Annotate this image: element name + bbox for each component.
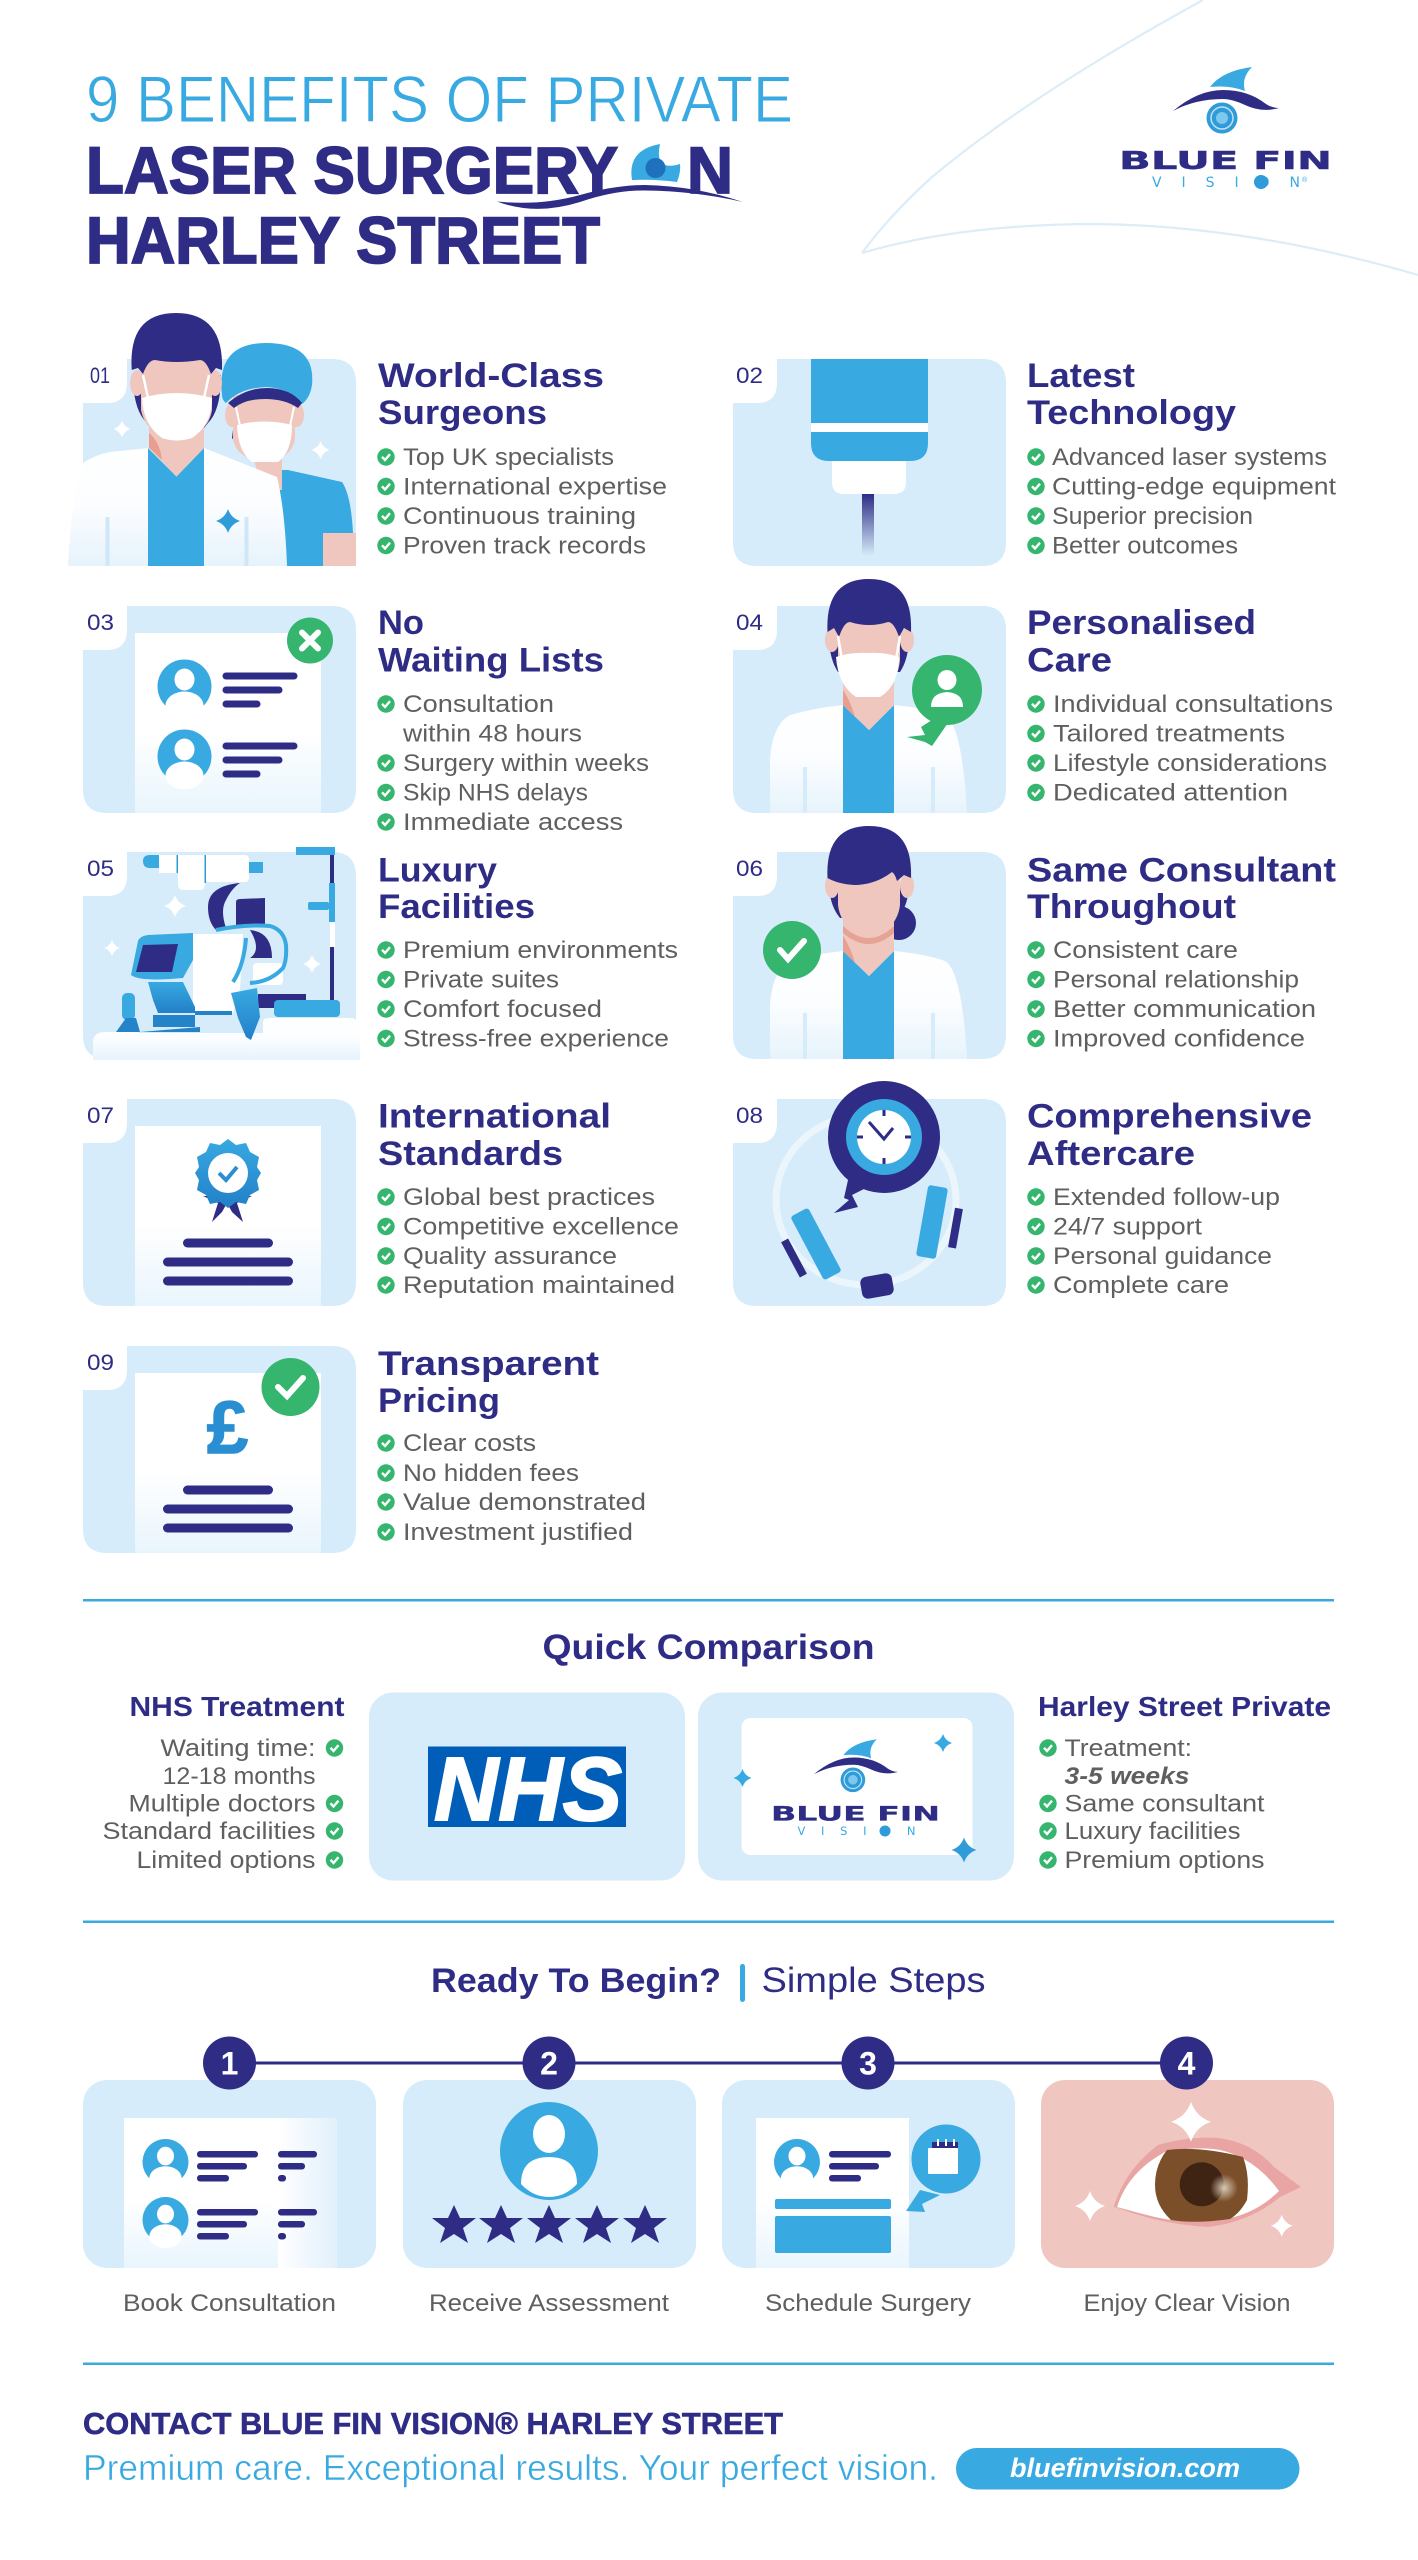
panel: 06 Same Consultant Throughout (733, 826, 1336, 1059)
panel: 09 Transparent Pricing (83, 1345, 646, 1553)
number: 03 (87, 610, 114, 635)
heading (378, 1345, 599, 1420)
heading: Technology (1027, 394, 1236, 432)
number: 06 (736, 856, 763, 881)
illustration: two surgeons (68, 313, 356, 566)
checklist: Premium environments (403, 937, 678, 964)
title: LASER SURGERY (86, 133, 618, 207)
number: 09 (87, 1350, 114, 1375)
heading (378, 1098, 611, 1173)
heading: Care (1027, 642, 1112, 680)
checklist: Personal guidance (1053, 1243, 1272, 1270)
checklist: Personal relationship (1053, 966, 1299, 994)
column: Harley Street Private: Same consultant (1064, 1790, 1265, 1818)
panel: Blue Fin Vision logo card: VISION (798, 1824, 916, 1838)
checklist (377, 937, 678, 1052)
title: N (687, 133, 733, 207)
heading: Facilities (378, 888, 535, 926)
title (86, 62, 793, 277)
section: Ready To Begin steps (83, 1961, 1334, 2317)
column: Harley Street Private: Harley Street Private (1038, 1691, 1331, 1722)
checklist: Reputation maintained (403, 1272, 675, 1299)
checklist: Proven track records (403, 532, 646, 560)
section: Quick Comparison (102, 1628, 1331, 1880)
checklist: Surgery within weeks (403, 750, 649, 777)
heading: Personalised (1027, 604, 1256, 642)
icon: eye letter O and swoosh (497, 144, 743, 209)
checklist: Advanced laser systems (1052, 444, 1327, 471)
illustration: price document (83, 1346, 356, 1553)
illustration: price document: £ (207, 1386, 248, 1469)
column: Harley Street Private (1038, 1691, 1331, 1874)
panel: 07 International Standards (83, 1098, 679, 1306)
step 2: Receive Assessment: Receive Assessment (429, 2290, 669, 2317)
title: 9 BENEFITS OF PRIVATE (86, 62, 793, 136)
heading (378, 604, 604, 680)
checklist: International expertise (403, 474, 667, 500)
checklist (1027, 691, 1333, 806)
panel: 04 Personalised Care (733, 579, 1333, 813)
tagline: Premium care. Exceptional results. Your perfect vision. (83, 2447, 938, 2488)
checklist: Clear costs (403, 1430, 536, 1457)
website pill: bluefinvision.com (1010, 2453, 1240, 2483)
checklist: Consistent care (1053, 937, 1238, 964)
step 1: Book Consultation: 1 (221, 2046, 238, 2082)
heading: Pricing (378, 1382, 500, 1420)
heading (378, 357, 604, 432)
illustration: certificate with rosette (83, 1099, 356, 1306)
checklist: Competitive excellence (403, 1214, 679, 1240)
column: NHS Treatment (102, 1691, 344, 1874)
checklist (377, 1430, 646, 1546)
column: NHS Treatment: Multiple doctors (128, 1790, 316, 1818)
checklist (1027, 444, 1336, 560)
heading: Throughout (1027, 888, 1236, 926)
number: 08 (736, 1103, 763, 1128)
panel: Blue Fin Vision logo card: BLUE FIN (771, 1802, 940, 1826)
checklist: Cutting-edge equipment (1052, 474, 1336, 500)
column: Harley Street Private: 3-5 weeks (1064, 1763, 1190, 1790)
heading: International (378, 1098, 611, 1136)
step 4: Enjoy Clear Vision: 4 (1178, 2046, 1196, 2082)
number: 07 (87, 1103, 114, 1128)
checklist: Quality assurance (403, 1243, 617, 1270)
checklist: within 48 hours (402, 720, 582, 748)
panel: NHS logo: NHS (434, 1740, 622, 1840)
illustration: eye examination machine (83, 847, 360, 1060)
title: HARLEY STREET (86, 203, 600, 277)
panel: 03 No Waiting Lists (83, 604, 649, 836)
checklist: Value demonstrated (403, 1489, 646, 1516)
column: NHS Treatment: Limited options (136, 1847, 316, 1874)
checklist: Superior precision (1052, 503, 1253, 530)
step 2: Receive Assessment: 2 (540, 2046, 558, 2082)
heading: Ready To Begin | Simple Steps (431, 1961, 986, 2002)
step 4: Enjoy Clear Vision (1041, 2036, 1334, 2317)
heading (1027, 357, 1236, 432)
step 3: Schedule Surgery: Schedule Surgery (765, 2290, 971, 2317)
checklist: Continuous training (403, 503, 636, 530)
illustration: laser device (733, 359, 1006, 566)
heading: Quick Comparison: Quick Comparison (542, 1628, 874, 1667)
column: Harley Street Private: Treatment: (1064, 1735, 1192, 1762)
illustration: patient documents (83, 606, 356, 813)
heading: Standards (378, 1135, 563, 1173)
column: Harley Street Private: Luxury facilities (1064, 1818, 1240, 1845)
footer: contact (83, 2406, 1300, 2490)
step 3: Schedule Surgery: 3 (859, 2046, 877, 2082)
panel: NHS logo (369, 1692, 685, 1880)
checklist: Extended follow-up (1053, 1184, 1280, 1211)
heading: Aftercare (1027, 1135, 1195, 1173)
logo: Blue Fin Vision (1119, 67, 1332, 191)
column: Harley Street Private: Premium options (1064, 1847, 1264, 1874)
checklist: Comfort focused (403, 996, 602, 1023)
checklist (1027, 1184, 1280, 1299)
number: 01 (90, 363, 110, 388)
number: 05 (87, 856, 114, 881)
panel: 02 Latest Technology (733, 357, 1336, 566)
heading (378, 852, 535, 926)
heading (1027, 604, 1256, 680)
step 1: Book Consultation: Book Consultation (123, 2290, 336, 2317)
column: NHS Treatment: 12-18 months (162, 1763, 316, 1790)
checklist: Lifestyle considerations (1053, 750, 1327, 777)
heading: Same Consultant (1027, 852, 1336, 890)
heading: Luxury (378, 852, 497, 890)
background fin outline (862, 0, 1418, 275)
heading: Ready To Begin | Simple Steps: Simple Steps (762, 1961, 986, 2000)
checklist: Better outcomes (1052, 532, 1238, 560)
column: NHS Treatment: Waiting time: (160, 1735, 316, 1762)
number: 04 (736, 610, 763, 635)
heading (1027, 852, 1336, 926)
contact heading: CONTACT BLUE FIN VISION® HARLEY STREET (83, 2406, 783, 2441)
checklist: Improved confidence (1053, 1026, 1305, 1052)
checklist: Investment justified (403, 1519, 633, 1546)
checklist: Tailored treatments (1053, 720, 1285, 748)
illustration: consultant with check badge (733, 826, 1006, 1059)
logo: Blue Fin Vision: ® (1302, 176, 1308, 184)
column: NHS Treatment: NHS Treatment (130, 1691, 344, 1722)
checklist: Better communication (1053, 996, 1316, 1023)
step 4: Enjoy Clear Vision: Enjoy Clear Vision (1084, 2290, 1290, 2317)
checklist: Stress-free experience (403, 1026, 669, 1052)
checklist (377, 444, 667, 560)
heading: No (378, 604, 424, 642)
checklist: No hidden fees (403, 1460, 579, 1487)
checklist (377, 691, 649, 836)
step 3: Schedule Surgery (722, 2036, 1015, 2317)
heading: Comprehensive (1027, 1098, 1312, 1136)
illustration: headset with clock bubble (733, 1081, 1006, 1306)
checklist (1027, 937, 1316, 1052)
checklist: Global best practices (403, 1184, 655, 1211)
step 1: Book Consultation (83, 2036, 376, 2317)
heading (1027, 1098, 1312, 1173)
column: NHS Treatment: Standard facilities (102, 1818, 316, 1845)
checklist: Private suites (403, 966, 559, 994)
logo: Blue Fin Vision: VISION (1152, 175, 1300, 191)
panel: 01 World-Class Surgeons (68, 313, 667, 566)
heading: Ready To Begin | Simple Steps: Ready To Begin? (431, 1962, 721, 2000)
checklist: 24/7 support (1053, 1214, 1202, 1240)
checklist (377, 1184, 679, 1299)
heading: Latest (1027, 357, 1135, 395)
checklist: Dedicated attention (1053, 780, 1288, 806)
checklist: Immediate access (403, 809, 623, 836)
step 2: Receive Assessment (403, 2036, 696, 2317)
heading: Transparent (378, 1345, 599, 1383)
checklist: Complete care (1053, 1272, 1229, 1299)
checklist: Individual consultations (1053, 691, 1333, 718)
panel: 08 Comprehensive Aftercare (733, 1081, 1312, 1306)
number: 02 (736, 363, 763, 388)
checklist: Consultation (403, 691, 554, 718)
website pill (956, 2448, 1300, 2490)
illustration: masked doctor with speech bubble (733, 579, 1006, 813)
panel: Blue Fin Vision logo card (698, 1692, 1014, 1880)
logo: Blue Fin Vision: BLUE FIN (1119, 146, 1332, 175)
heading: Waiting Lists (378, 642, 604, 680)
heading: Surgeons (378, 394, 547, 432)
checklist: Skip NHS delays (403, 780, 588, 806)
panel: 05 Luxury Facilities (83, 847, 678, 1060)
checklist: Top UK specialists (403, 444, 614, 471)
heading: World-Class (378, 357, 604, 395)
